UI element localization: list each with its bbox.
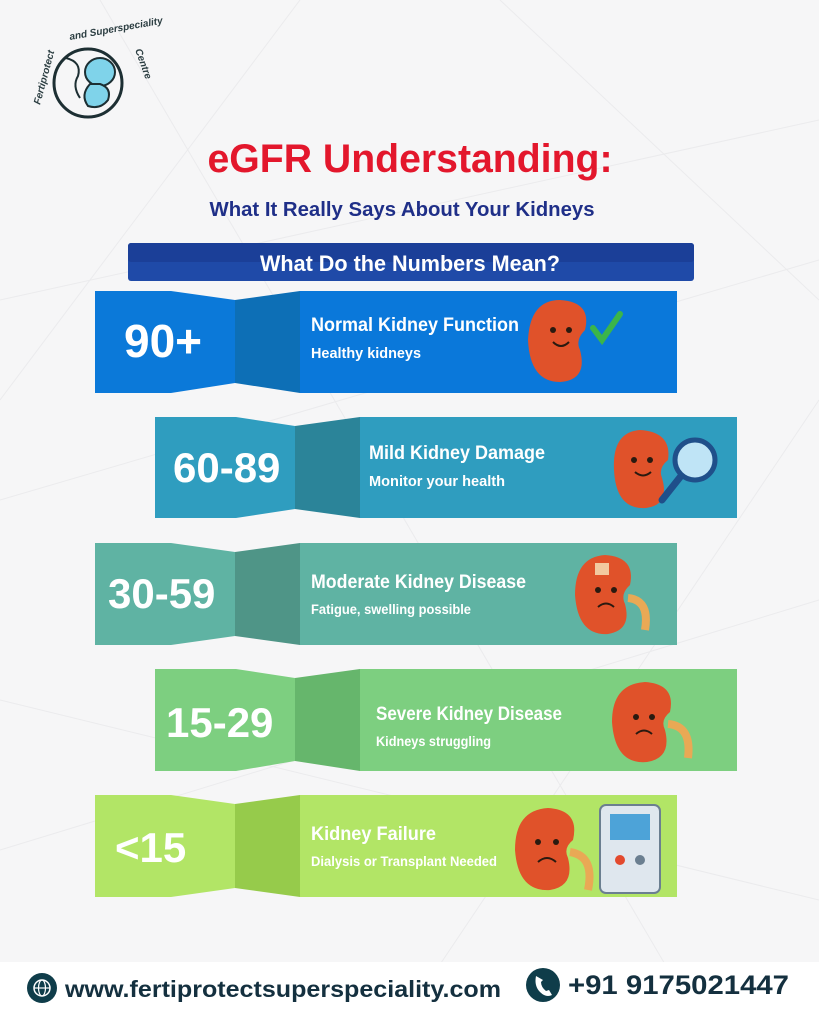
icon: tired kidney	[575, 555, 646, 634]
icon: phone	[526, 968, 560, 1002]
row 1: 90+: 90+	[124, 315, 202, 367]
banner: what do the numbers mean	[128, 243, 694, 281]
row 1: 90+: Healthy kidneys	[311, 345, 421, 362]
row 4: 15-29	[155, 669, 737, 771]
icon: globe	[27, 973, 57, 1003]
row 1: 90+: Normal Kidney Function	[311, 315, 519, 336]
row 4: 15-29: Kidneys struggling	[376, 733, 491, 749]
row 3: 30-59	[95, 543, 677, 645]
row 1: 90+	[95, 291, 677, 393]
row 2: 60-89: Monitor your health	[369, 473, 505, 490]
row 4: 15-29: Severe Kidney Disease	[376, 704, 562, 725]
logo: and Superspeciality	[69, 16, 164, 43]
row 5: <15	[95, 795, 677, 897]
row 5: <15: Kidney Failure	[311, 824, 436, 845]
row 5: <15: Dialysis or Transplant Needed	[311, 853, 497, 869]
icon: kidney with magnifier	[614, 430, 715, 508]
row 2: 60-89	[155, 417, 737, 518]
row 5: <15: <15	[115, 824, 186, 871]
subtitle: What It Really Says About Your Kidneys	[210, 199, 594, 221]
icon: sad kidney	[612, 682, 689, 762]
logo: Fertiprotect	[32, 49, 57, 106]
row 2: 60-89: Mild Kidney Damage	[369, 443, 545, 464]
phone number: +91 9175021447	[568, 970, 789, 1000]
row 2: 60-89: 60-89	[173, 444, 280, 491]
row 4: 15-29: 15-29	[166, 699, 273, 746]
row 3: 30-59: Moderate Kidney Disease	[311, 572, 526, 593]
row 3: 30-59: 30-59	[108, 570, 215, 617]
footer	[0, 962, 819, 1024]
website: www.fertiprotectsuperspeciality.com	[64, 976, 501, 1002]
logo: Centre	[132, 47, 154, 81]
title: eGFR Understanding:	[208, 137, 612, 181]
icon: happy kidney with check	[528, 300, 620, 382]
icon: kidney with dialysis machine	[515, 805, 660, 893]
banner: what do the numbers mean: What Do the Numbers Mean?	[260, 251, 560, 276]
row 3: 30-59: Fatigue, swelling possible	[311, 601, 471, 617]
logo	[32, 16, 164, 117]
